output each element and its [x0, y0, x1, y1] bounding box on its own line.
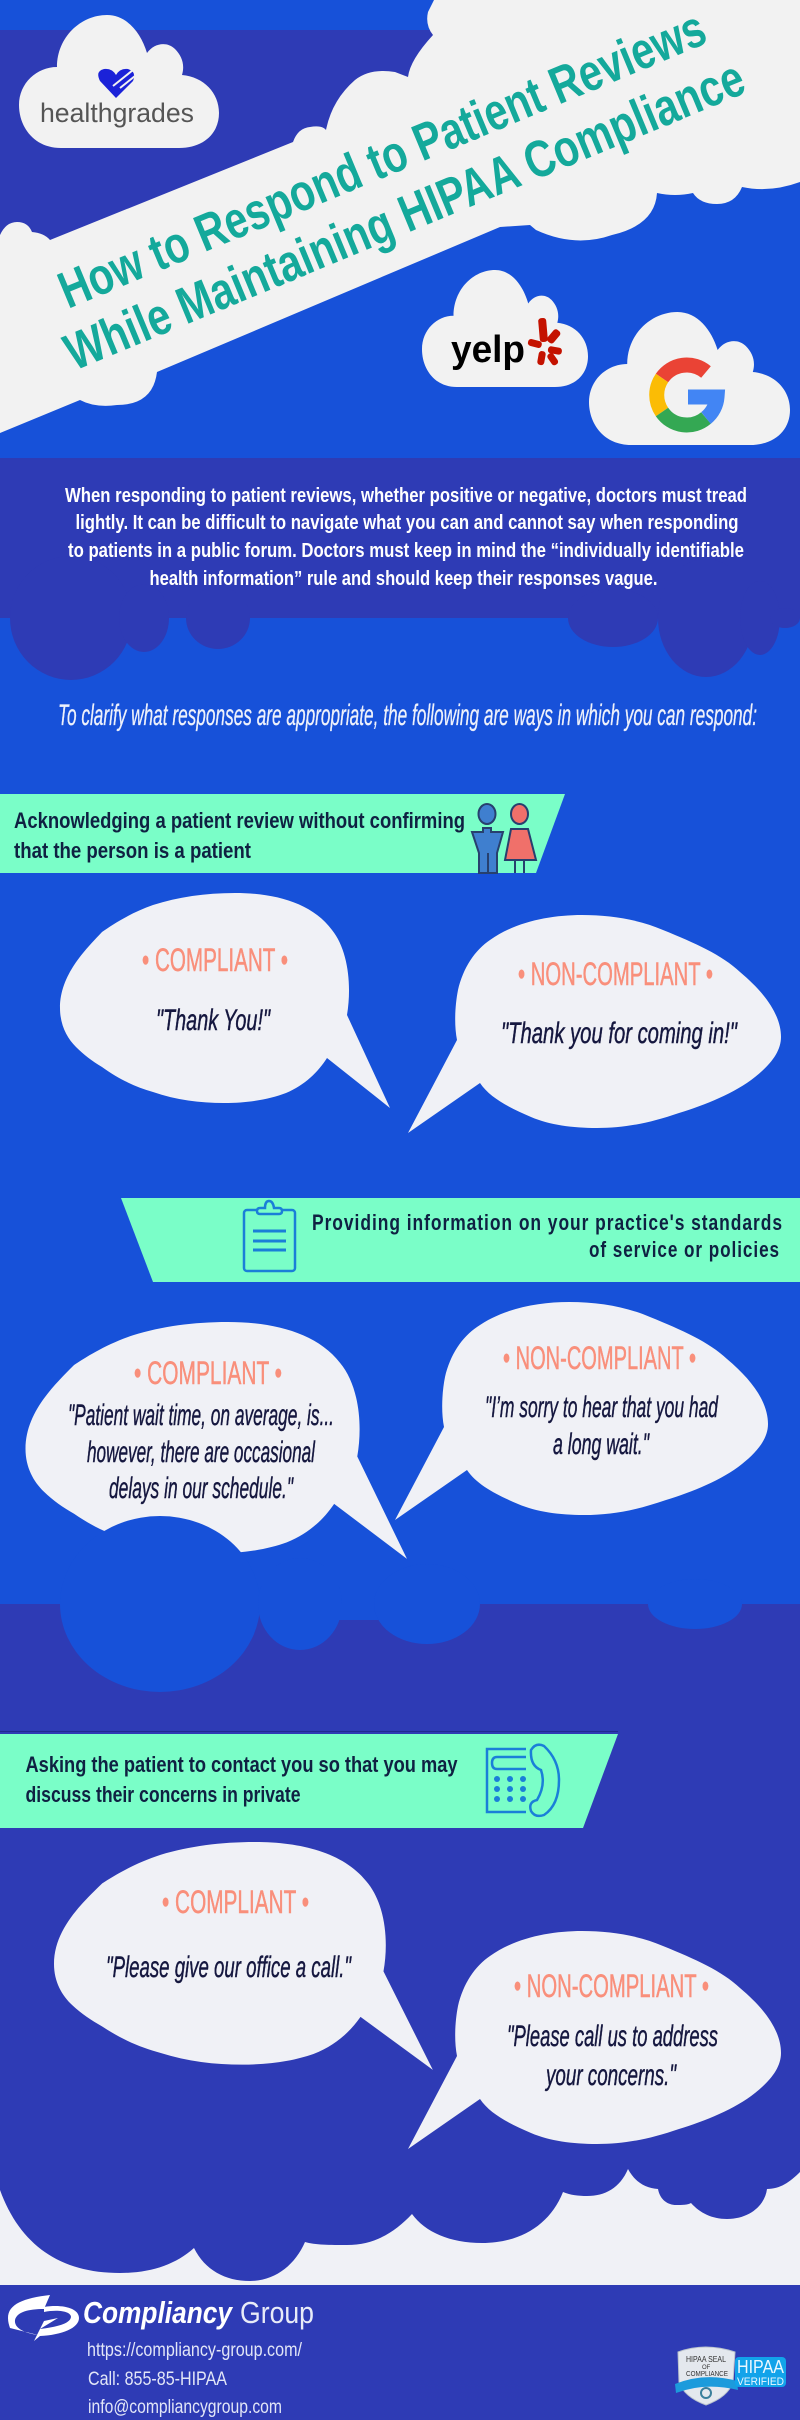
- HIPAA seal badge: HIPAA: [737, 2357, 784, 2377]
- banner 1: Acknowledging a patient review without confirming: [14, 808, 465, 833]
- intro paragraph: health information” rule and should keep their responses vague.: [150, 568, 658, 590]
- google cloud logo: [589, 312, 790, 445]
- logo: Compliancy Group: Group: [240, 2295, 314, 2330]
- speech bubble: compliant 2: however, there are occasional: [87, 1436, 316, 1469]
- speech bubble: compliant 3: "Please give our office a call.": [106, 1951, 352, 1984]
- HIPAA seal badge: VERIFIED: [737, 2376, 784, 2388]
- lower dark panel with blue cloud drips: [0, 1516, 800, 2420]
- speech bubble: non-compliant 2: a long wait.": [553, 1428, 650, 1461]
- header dark panel: [0, 30, 800, 330]
- banner 3: discuss their concerns in private: [26, 1782, 300, 1807]
- speech bubble: compliant 3: • COMPLIANT •: [162, 1884, 309, 1920]
- speech bubble: compliant 2: delays in our schedule.": [109, 1472, 294, 1505]
- footer contact details: https://compliancy-group.com/: [87, 2340, 303, 2361]
- speech bubble: non-compliant 2: [395, 1302, 768, 1520]
- speech bubble: non-compliant 3: [408, 1931, 781, 2149]
- speech bubble: compliant 1: • COMPLIANT •: [142, 942, 288, 978]
- banner 3: Asking the patient to contact you so that you may: [26, 1752, 458, 1777]
- icon: clipboard: [244, 1201, 295, 1271]
- banner 1: that the person is a patient: [14, 838, 252, 863]
- icon: man and woman: [472, 804, 536, 873]
- HIPAA seal badge: [675, 2347, 786, 2405]
- title cloud band: [0, 0, 800, 433]
- logo: Compliancy Group: [8, 2295, 314, 2341]
- healthgrades cloud logo: healthgrades: [40, 98, 194, 128]
- footer contact details: Call: 855-85-HIPAA: [88, 2369, 227, 2390]
- banner 2: [121, 1198, 800, 1282]
- HIPAA seal badge: COMPLIANCE: [686, 2371, 728, 2378]
- banner 1: [0, 794, 565, 873]
- yelp cloud logo: [422, 270, 588, 387]
- banner 3: [0, 1731, 618, 1828]
- speech bubble: compliant 2: "Patient wait time, on average, is...: [68, 1399, 334, 1432]
- speech bubble: compliant 1: "Thank You!": [156, 1004, 271, 1037]
- speech bubble: non-compliant 1: [408, 915, 781, 1133]
- icon: telephone: [487, 1745, 559, 1816]
- HIPAA seal badge: OF: [702, 2365, 711, 2371]
- header blue lower panel: [0, 95, 800, 458]
- intro paragraph: [65, 485, 747, 590]
- logo: Compliancy Group: Compliancy: [83, 2295, 233, 2330]
- yelp cloud logo: yelp: [451, 329, 525, 371]
- speech bubble: compliant 2: • COMPLIANT •: [134, 1355, 282, 1391]
- bottom light cloud: [0, 2169, 800, 2285]
- speech bubble: compliant 2: [26, 1322, 407, 1559]
- footer contact details: info@compliancygroup.com: [88, 2397, 282, 2418]
- HIPAA seal badge: HIPAA SEAL: [686, 2355, 726, 2364]
- footer panel: [0, 2285, 800, 2420]
- speech bubble: compliant 1: [60, 893, 390, 1108]
- intro panel with cloud drips: [0, 458, 800, 680]
- speech bubble: non-compliant 3: your concerns.": [545, 2059, 677, 2092]
- speech bubble: compliant 3: [54, 1842, 433, 2070]
- footer contact details: [87, 2340, 303, 2418]
- healthgrades cloud logo: [19, 15, 219, 148]
